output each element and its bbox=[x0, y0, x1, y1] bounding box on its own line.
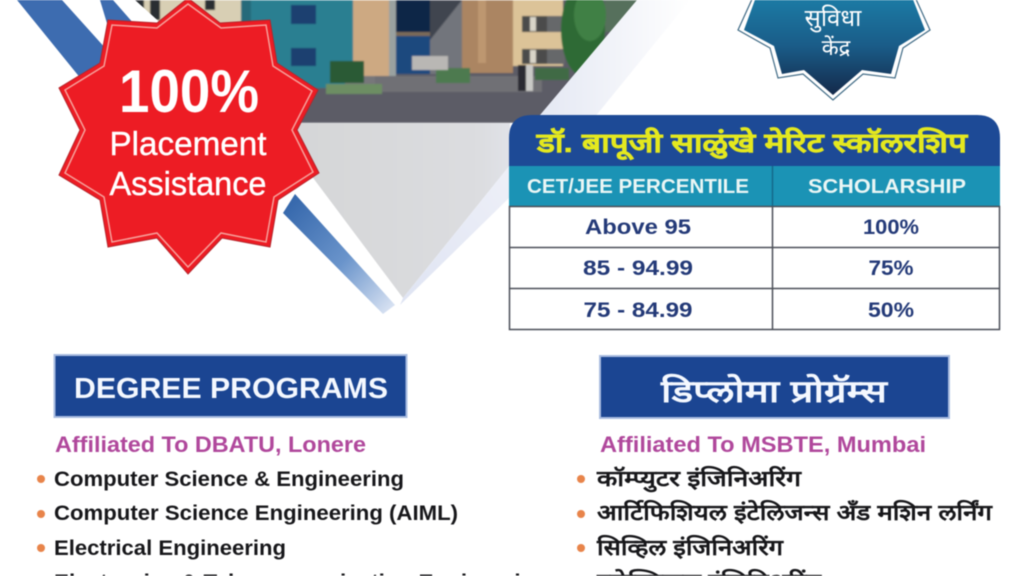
campus building photo bbox=[130, 0, 650, 123]
grey diamond panel bbox=[272, 123, 533, 305]
badge headline: 100% bbox=[119, 58, 259, 125]
degree affiliation: Affiliated To DBATU, Lonere bbox=[55, 432, 366, 457]
degree program list bbox=[37, 468, 548, 576]
diploma program list: कॉम्प्युटर इंजिनिअरिंग bbox=[596, 465, 803, 493]
table title: डॉ. बापूजी साळुंखे मेरिट स्कॉलरशिप bbox=[536, 127, 969, 161]
light halo beside the photo bbox=[533, 0, 690, 123]
row one: Above 95 bbox=[585, 216, 691, 239]
diploma affiliation: Affiliated To MSBTE, Mumbai bbox=[600, 432, 926, 457]
table column headers bbox=[509, 166, 1000, 206]
scholarship table: 50% bbox=[868, 299, 914, 322]
degree program list: Computer Science Engineering (AIML) bbox=[54, 502, 458, 525]
heading: degree programs: DEGREE PROGRAMS bbox=[74, 373, 388, 405]
diploma program list bbox=[577, 465, 994, 576]
degree program list: Computer Science & Engineering bbox=[54, 468, 404, 491]
scholarship table bbox=[509, 115, 1000, 330]
row three: 75 - 84.99 bbox=[584, 299, 692, 322]
scholarship table: 100% bbox=[863, 216, 919, 239]
heading: diploma programs bbox=[600, 356, 949, 418]
badge: suvidha kendra bbox=[738, 0, 930, 100]
table title bar bbox=[509, 115, 1000, 166]
diploma program list: सिव्हिल इंजिनिअरिंग bbox=[596, 534, 785, 560]
badge line one: Placement bbox=[110, 125, 266, 162]
heading: degree programs bbox=[54, 355, 406, 417]
badge: 100% placement assistance bbox=[59, 0, 319, 274]
scholarship table: 75% bbox=[868, 257, 914, 280]
heading: diploma programs: डिप्लोमा प्रोग्रॅम्स bbox=[660, 373, 888, 409]
scholarship table: SCHOLARSHIP bbox=[808, 176, 966, 198]
badge line two: Assistance bbox=[110, 165, 266, 202]
row two: 85 - 94.99 bbox=[583, 257, 693, 280]
diploma program list: आर्टिफिशियल इंटेलिजन्स अँड मशिन लर्निंग bbox=[597, 499, 994, 525]
decorative diagonal bands bbox=[17, 0, 395, 314]
table body bbox=[510, 206, 1000, 330]
badge text: सुविधा bbox=[805, 4, 862, 33]
degree program list: Electrical Engineering bbox=[54, 537, 286, 560]
badge text line two: केंद्र bbox=[822, 35, 851, 60]
scholarship table: CET/JEE PERCENTILE bbox=[527, 176, 749, 198]
